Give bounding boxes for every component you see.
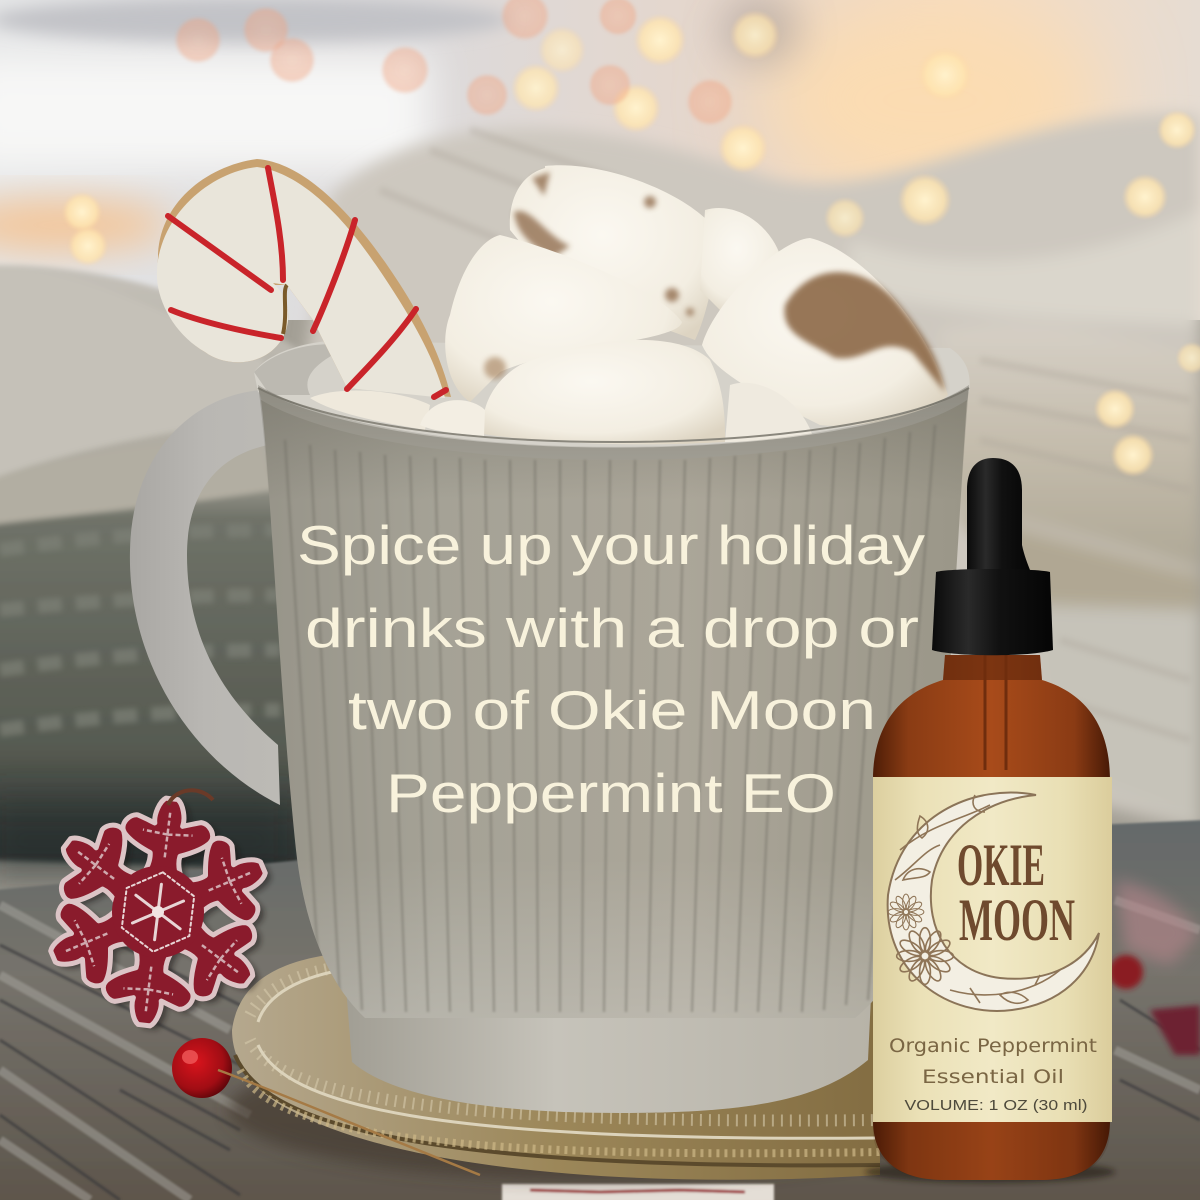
headline text: drinks with a drop or: [305, 597, 919, 659]
volume: VOLUME: 1 OZ (30 ml): [904, 1098, 1088, 1114]
headline text: Peppermint EO: [386, 762, 836, 824]
mug interior and rim back: [254, 340, 970, 449]
bokeh lights: [62, 0, 1200, 477]
headline text: two of Okie Moon: [348, 679, 876, 741]
mug body with vertical ribs: [250, 370, 980, 1020]
marshmallow right large: [702, 238, 948, 426]
product label: MOON: [959, 887, 1075, 953]
product label: Essential Oil: [922, 1066, 1064, 1088]
snowflake ornament: [24, 784, 298, 1044]
headline text: Spice up your holiday: [297, 514, 926, 576]
mug rim lip: [258, 388, 969, 461]
red cherry bead: [172, 1038, 480, 1175]
amber glass: [873, 655, 1110, 1180]
knit blanket: left stack: [0, 265, 300, 880]
mug handle: [130, 390, 280, 805]
brand name: OKIE: [957, 832, 1045, 898]
marshmallows in the mug: [310, 165, 948, 444]
mug foot: [345, 975, 872, 1113]
candy cane cookie: [157, 159, 451, 398]
headline text: [297, 514, 926, 824]
rubber dropper bulb: [967, 458, 1030, 570]
marshmallow front centre: [483, 340, 725, 444]
black cap: [932, 569, 1053, 655]
crescent moon logo: [888, 793, 1099, 1011]
knit blanket: back centre and right: [300, 114, 1200, 830]
marshmallow left centre: [445, 235, 682, 402]
essential oil bottle: [865, 458, 1115, 1183]
product name: Organic Peppermint: [889, 1035, 1097, 1057]
wooden table: [0, 820, 1200, 1200]
product label: [873, 777, 1112, 1122]
gold coaster: [228, 950, 972, 1180]
marshmallow back top: [510, 165, 715, 340]
